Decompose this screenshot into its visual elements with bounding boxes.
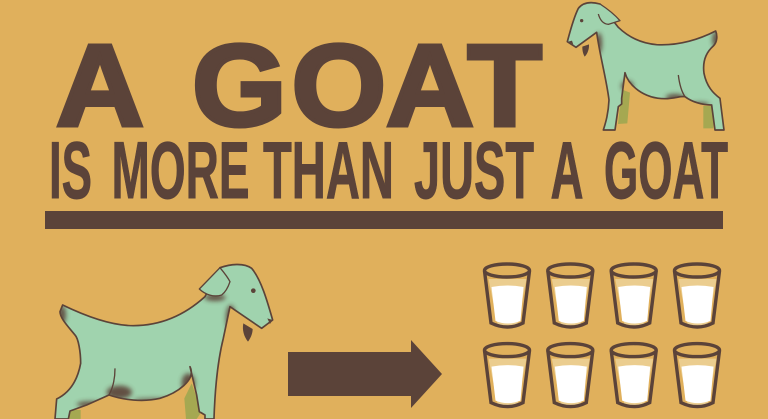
glass 5: [484, 344, 530, 407]
subtitle: is more than just a goat: JUST: [414, 126, 534, 216]
glass 4: [674, 264, 720, 327]
glass 8: [674, 344, 720, 407]
divider bar: [45, 211, 723, 229]
glass 2: [548, 264, 593, 327]
glass 7: [611, 344, 656, 407]
arrow: [288, 340, 442, 408]
subtitle: is more than just a goat: A: [550, 126, 584, 216]
icon: small goat: [567, 3, 724, 130]
glass 6: [548, 344, 593, 407]
subtitle: is more than just a goat: [49, 126, 728, 216]
icon: large goat: [55, 264, 273, 419]
subtitle: is more than just a goat: MORE: [112, 126, 250, 216]
glass 3: [611, 264, 656, 327]
glass 1: [484, 264, 530, 327]
subtitle: is more than just a goat: IS: [49, 126, 92, 216]
title: A GOAT: A GOAT: [56, 21, 542, 151]
glasses of milk: [484, 264, 720, 407]
subtitle: is more than just a goat: THAN: [263, 126, 394, 216]
